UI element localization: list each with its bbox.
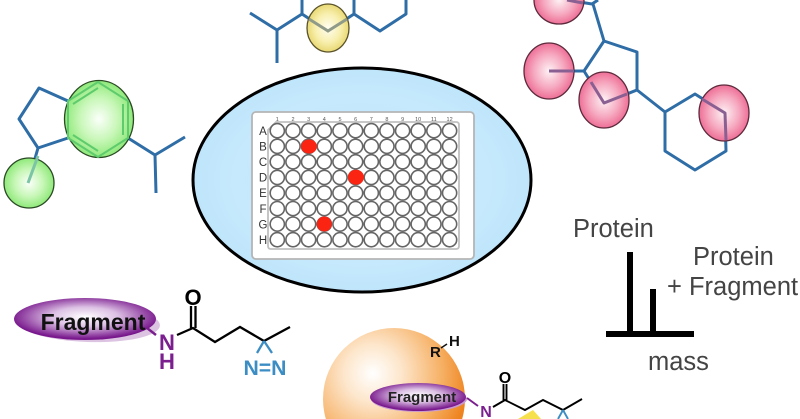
row labels: A xyxy=(259,126,267,138)
column labels: 6 xyxy=(354,117,357,123)
row labels xyxy=(259,126,268,247)
column labels xyxy=(276,117,453,123)
spectrum peaks and baseline xyxy=(606,252,694,337)
column labels: 10 xyxy=(415,117,421,123)
peak labels: Protein xyxy=(573,215,654,243)
row labels: E xyxy=(259,188,267,200)
R-H label xyxy=(430,333,460,361)
probe: fragment with diazirine xyxy=(14,285,290,380)
panel: microplate in blue ellipse xyxy=(193,68,531,292)
mass spectrum xyxy=(573,215,798,376)
fragment label: Fragment xyxy=(388,389,456,406)
molecule: pink fragments xyxy=(524,0,749,170)
probe: fragment with diazirine: H xyxy=(159,349,175,374)
amine: N xyxy=(159,330,175,355)
linker xyxy=(467,398,478,406)
carbon chain xyxy=(177,306,290,342)
96-well plate xyxy=(252,112,474,259)
row labels: G xyxy=(259,220,268,232)
blue ellipse background xyxy=(193,68,531,292)
fragment label: Fragment xyxy=(41,309,146,335)
column labels: 7 xyxy=(370,117,373,123)
protein sphere with bound probe xyxy=(323,328,582,419)
column labels: 9 xyxy=(401,117,404,123)
column labels: 12 xyxy=(447,117,453,123)
diazirine xyxy=(257,341,272,353)
column labels: 3 xyxy=(307,117,310,123)
carbonyl oxygen: O xyxy=(184,285,202,310)
fragment oval xyxy=(15,301,161,345)
molecule: green fragment xyxy=(4,80,185,208)
peak labels: mass xyxy=(648,348,709,376)
molecule: yellow fragment xyxy=(250,0,406,63)
row labels: F xyxy=(259,204,267,216)
row labels: H xyxy=(259,235,267,247)
column labels: 8 xyxy=(385,117,388,123)
carbon chain xyxy=(493,384,582,410)
probe: fragment with diazirine: N=N xyxy=(244,357,286,380)
peak labels xyxy=(573,215,798,376)
row labels: C xyxy=(259,157,267,169)
R-H label: R xyxy=(430,344,441,361)
column labels: 2 xyxy=(291,117,295,123)
column labels: 11 xyxy=(431,117,437,123)
red hit wells xyxy=(301,140,364,232)
row labels: B xyxy=(259,142,267,154)
peak labels: Protein xyxy=(693,243,774,271)
fragment oval xyxy=(371,386,467,412)
R-H label: H xyxy=(449,333,460,350)
column labels: 1 xyxy=(276,117,279,123)
diazirine xyxy=(558,410,568,419)
column labels: 4 xyxy=(323,117,326,123)
carbonyl oxygen: O xyxy=(499,370,511,387)
orange protein sphere xyxy=(323,328,465,419)
linker to amine xyxy=(147,328,156,335)
column labels: 5 xyxy=(338,117,342,123)
peak labels: + Fragment xyxy=(667,273,798,301)
yellow adduct xyxy=(518,410,541,419)
row labels: D xyxy=(259,172,267,184)
wells xyxy=(270,124,457,247)
